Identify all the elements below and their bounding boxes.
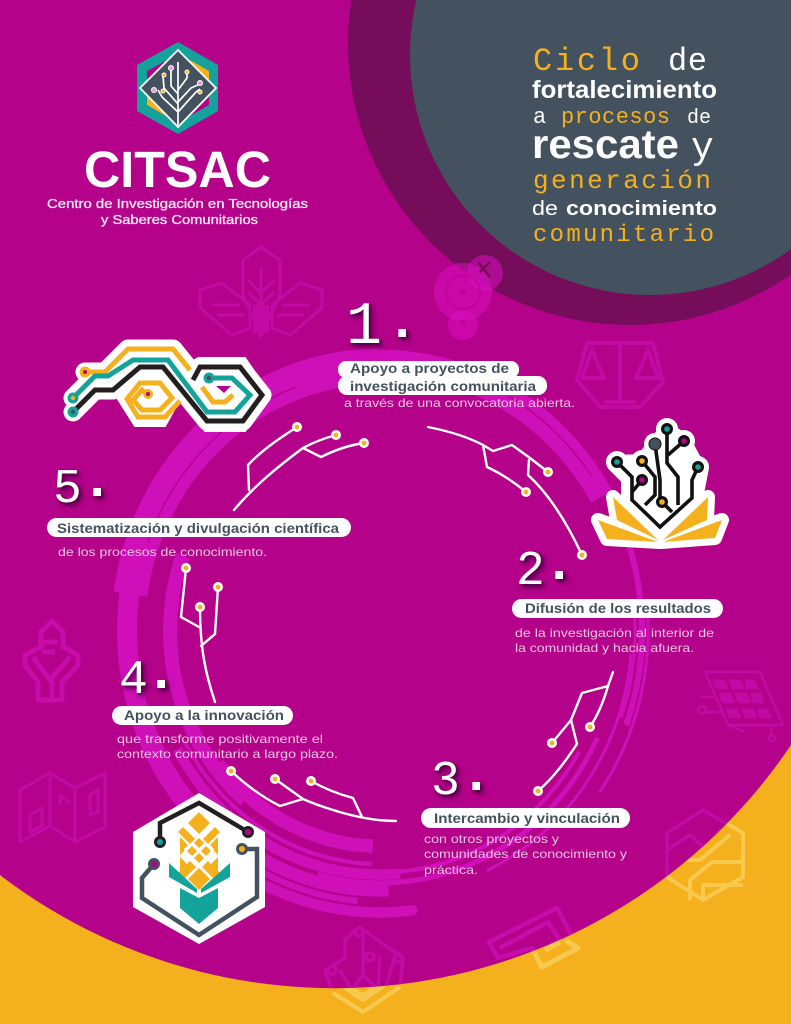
step 3 heading (421, 808, 630, 828)
number 4 (119, 644, 177, 708)
watermark icon: leaves (200, 247, 322, 337)
icon: circuit tree book (598, 423, 722, 542)
brush ring (22, 255, 738, 1007)
step 5 heading (47, 518, 351, 537)
watermark icon: solar panel (698, 672, 783, 741)
icon: circuit corn (133, 793, 265, 944)
step 1 description: a través de una convocatoria abierta. (344, 396, 575, 410)
step 4 (112, 644, 338, 761)
title: de (687, 107, 711, 130)
icon: woven circuit serpent (68, 349, 270, 431)
title: y (691, 127, 714, 170)
watermark icon: circuit book on yellow (333, 975, 400, 1012)
watermark icon: map (20, 773, 105, 842)
watermark icon: frame on magenta (489, 908, 578, 967)
slate title circle (410, 0, 791, 295)
step 2 description (515, 626, 714, 655)
watermark icon: microphone (25, 621, 78, 700)
step 4 description: contexto comunitario a largo plazo. (117, 747, 338, 761)
step 1 heading (338, 361, 547, 395)
number 1: 1 (346, 294, 382, 362)
step 2 description: de la investigación al interior de (515, 626, 714, 640)
logo subtitle: Centro de Investigación en Tecnologías (47, 196, 309, 211)
title: Ciclo (533, 43, 640, 80)
logo subtitle: y Saberes Comunitarios (101, 212, 259, 227)
step 4 description (117, 732, 338, 761)
number 3 (431, 746, 492, 809)
watermark icon: frame on yellow (532, 940, 578, 967)
circuit arc: 3 to 4 (226, 766, 396, 821)
number 3: 3 (431, 755, 460, 809)
step 2 heading (512, 599, 723, 618)
watermark icon: hexagon landscape on yellow (667, 810, 743, 900)
step 3 description: comunidades de conocimiento y (424, 847, 627, 861)
step 1 (338, 293, 575, 410)
step 2 heading: Difusión de los resultados (525, 601, 711, 616)
circuit arc: 5 to 1 (234, 422, 369, 510)
circuit arc: 4 to 5 (181, 563, 223, 702)
title: generación (533, 166, 711, 196)
step 3 description: con otros proyectos y (424, 832, 559, 846)
number 1 (346, 293, 418, 362)
title: comunitario (533, 222, 714, 249)
step 1 heading: investigación comunitaria (350, 379, 537, 394)
step 1 heading: Apoyo a proyectos de (350, 361, 510, 376)
title (532, 43, 717, 249)
step 4 description: que transforme positivamente el (117, 732, 323, 746)
number 5: 5 (53, 463, 82, 517)
title: conocimiento (566, 198, 717, 220)
logo wordmark: CITSAC (84, 141, 271, 198)
logo subtitle (47, 196, 309, 227)
title: de (668, 43, 707, 80)
step 5 (47, 452, 351, 559)
number 5 (53, 452, 113, 517)
number 1: . (386, 293, 418, 354)
watermark icon: scales (577, 343, 663, 407)
circuit arc: 1 to 2 (428, 427, 587, 560)
number 4: . (145, 644, 177, 705)
circuit arc: 2 to 3 (533, 672, 613, 796)
title: procesos (561, 105, 670, 130)
title: rescate (532, 121, 679, 167)
step 3 heading: Intercambio y vinculación (434, 811, 620, 826)
step 4 heading: Apoyo a la innovación (124, 708, 284, 723)
step 3 description: práctica. (424, 863, 478, 877)
number 5: . (81, 452, 113, 513)
logo (137, 42, 218, 134)
watermark icon: hexagon landscape on magenta (665, 808, 728, 878)
step 2 description: la comunidad y hacia afuera. (515, 641, 694, 655)
title: fortalecimiento (532, 76, 717, 104)
number 2 (516, 535, 575, 599)
title: a (533, 105, 546, 130)
step 4 heading (112, 706, 293, 725)
number 4: 4 (119, 654, 148, 708)
title: de (532, 198, 558, 220)
step 5 heading: Sistematización y divulgación científica (57, 521, 340, 536)
step 5 description: de los procesos de conocimiento. (58, 545, 267, 559)
step 3 description (424, 832, 627, 877)
watermark icon: seal (434, 255, 503, 340)
number 3: . (460, 746, 492, 807)
dark purple circle (348, 0, 791, 325)
step 2 (512, 535, 723, 655)
number 2: . (543, 535, 575, 596)
watermark icon: circuit book on magenta (325, 927, 403, 993)
number 2: 2 (516, 545, 545, 599)
step 3 (421, 746, 630, 877)
